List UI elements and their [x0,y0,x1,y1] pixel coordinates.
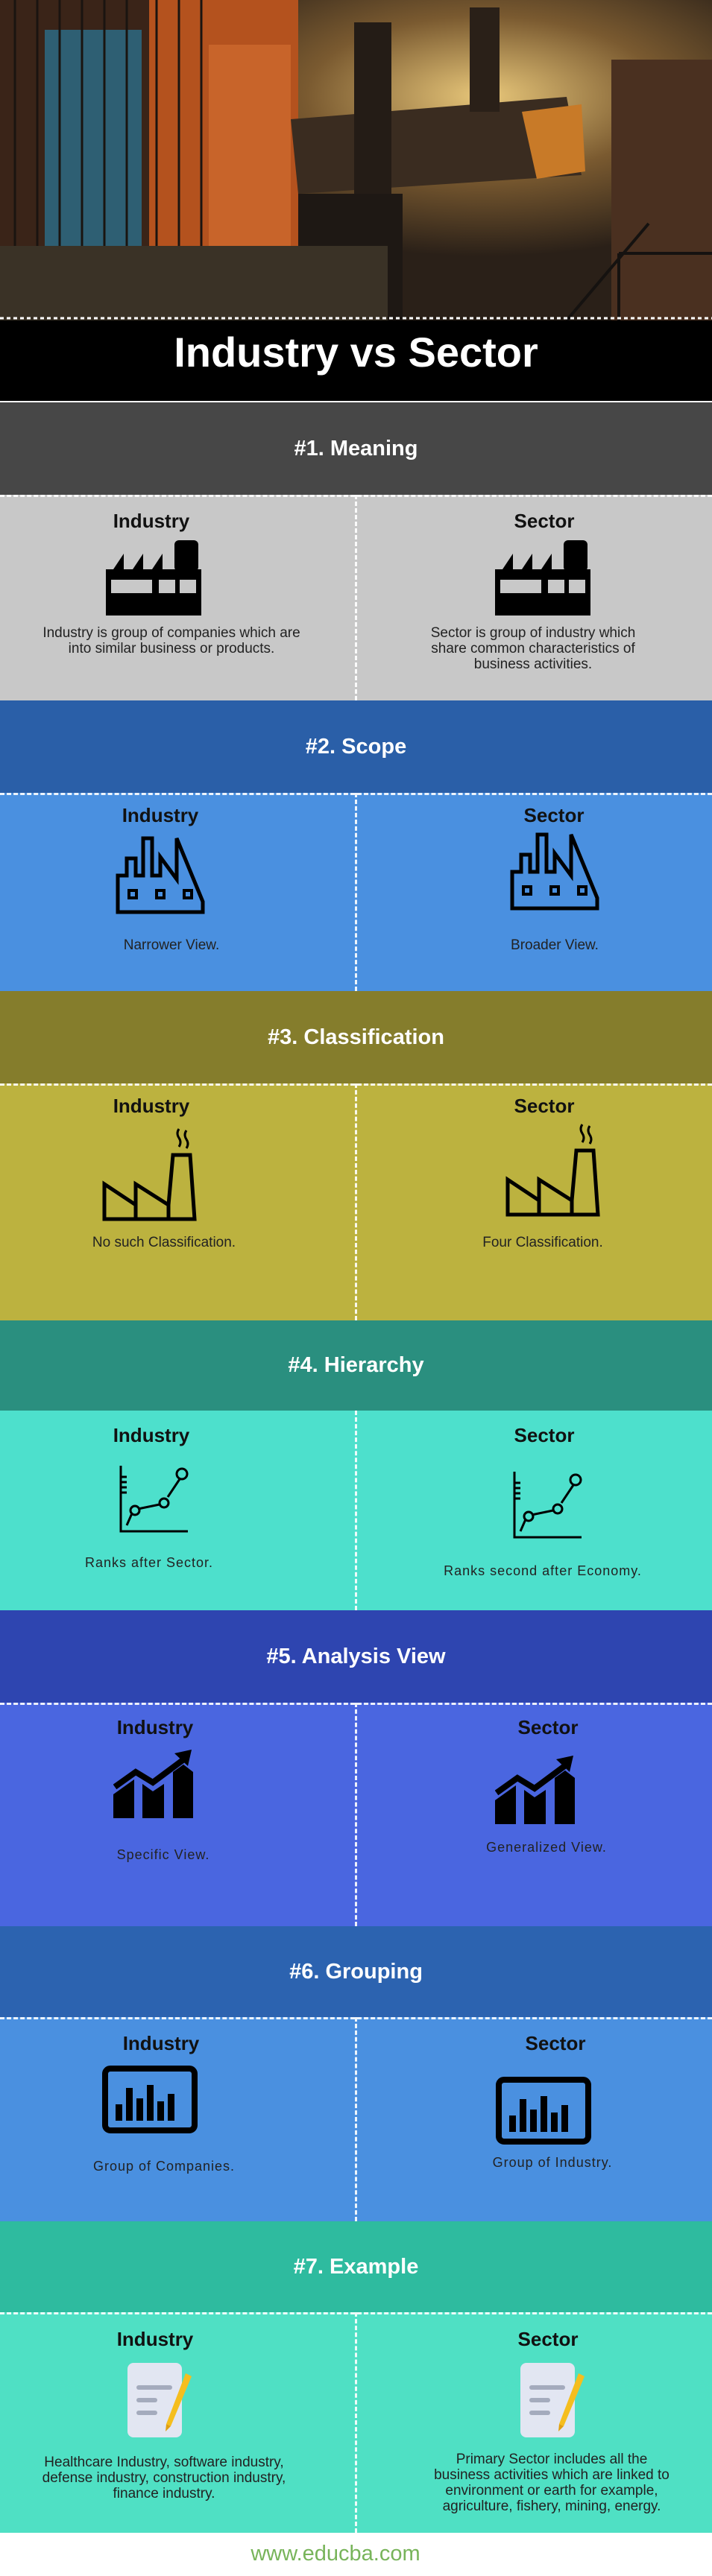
icon: smoking factory [103,1128,197,1221]
label: sector: Sector [514,1095,574,1117]
text: no such classification: No such Classification. [92,1235,236,1250]
label: sector: Sector [514,510,574,532]
text: industry meaning: into similar business or products. [69,641,274,656]
text: industry examples: Healthcare Industry, software industry, [44,2455,284,2470]
label: industry: Industry [113,1095,189,1117]
section 7 header: #7. Example [294,2255,418,2279]
hero photo [0,0,712,320]
text: four classification: Four Classification. [482,1235,603,1250]
icon: outline factory sector [510,833,599,911]
icon: smoking factory sector [505,1124,600,1216]
section 4 header: #4. Hierarchy [288,1353,424,1377]
title bar: Industry vs Sector [174,329,538,376]
section 6 body [0,2017,712,2221]
section 4 header [0,1320,712,1411]
icon: filled factory [106,540,201,615]
section 3 header [0,991,712,1083]
section 3 header: #3. Classification [268,1025,444,1049]
label: sector: Sector [526,2032,585,2054]
text: sector examples: Primary Sector includes all the [456,2452,647,2467]
text: group of companies: Group of Companies. [93,2159,235,2174]
label: industry: Industry [117,2328,193,2350]
section 6 header: #6. Grouping [289,1960,423,1984]
label: industry: Industry [122,804,198,826]
text: industry examples [42,2455,286,2501]
label: industry: Industry [123,2032,199,2054]
icon: filled factory sector [495,540,590,615]
section 1 body [0,495,712,700]
icon: growth bars [113,1750,193,1818]
section 5 body [0,1703,712,1926]
text: specific view: Specific View. [117,1847,209,1862]
text: ranks after sector: Ranks after Sector. [85,1555,213,1570]
section 1 header: #1. Meaning [294,437,418,461]
section 5 header [0,1610,712,1703]
label: sector: Sector [524,804,584,826]
label: industry: Industry [113,510,189,532]
icon: line chart [119,1466,188,1532]
text: broader view: Broader View. [511,937,599,953]
text: sector meaning: share common characteristics of [431,641,635,656]
label: industry: Industry [113,1424,189,1446]
text: industry examples: finance industry. [113,2486,215,2501]
section 7 body [0,2312,712,2533]
text: sector meaning: business activities. [474,656,592,672]
icon: bar chart monitor sector [496,2077,591,2145]
text: ranks second after economy: Ranks second after Economy. [444,1563,642,1578]
label: sector: Sector [518,2328,578,2350]
text: sector examples [434,2452,670,2514]
text: sector meaning [431,625,635,672]
label: sector: Sector [518,1716,578,1738]
section 2 body [0,793,712,991]
text: group of industry: Group of Industry. [493,2155,612,2170]
section 3 body [0,1083,712,1320]
icon: growth bars sector [495,1756,575,1824]
icon: bar chart monitor [102,2066,198,2133]
icon: document with pencil [127,2363,192,2437]
text: generalized view: Generalized View. [486,1840,607,1855]
text: sector examples: environment or earth for example, [445,2483,658,2499]
section 7 header [0,2221,712,2312]
section 1 header [0,402,712,495]
icon: line chart sector [513,1472,582,1538]
label: industry: Industry [117,1716,193,1738]
icon: document with pencil sector [520,2363,585,2437]
text: sector examples: business activities which are linked to [434,2467,670,2483]
footer: website: www.educba.com [251,2542,420,2566]
icon: outline factory [116,836,204,914]
title bar [0,320,712,401]
label: sector: Sector [514,1424,574,1446]
section 2 header: #2. Scope [306,735,406,759]
text: industry meaning [42,625,300,656]
text: sector examples: agriculture, fishery, mining, energy. [443,2499,661,2514]
section 6 header [0,1926,712,2017]
section 2 header [0,700,712,793]
text: sector meaning: Sector is group of industry which [431,625,635,641]
text: industry meaning: Industry is group of companies which are [42,625,300,641]
text: industry examples: defense industry, construction industry, [42,2470,286,2486]
text: narrower view: Narrower View. [124,937,219,953]
section 4 body [0,1411,712,1610]
section 5 header: #5. Analysis View [266,1644,446,1668]
